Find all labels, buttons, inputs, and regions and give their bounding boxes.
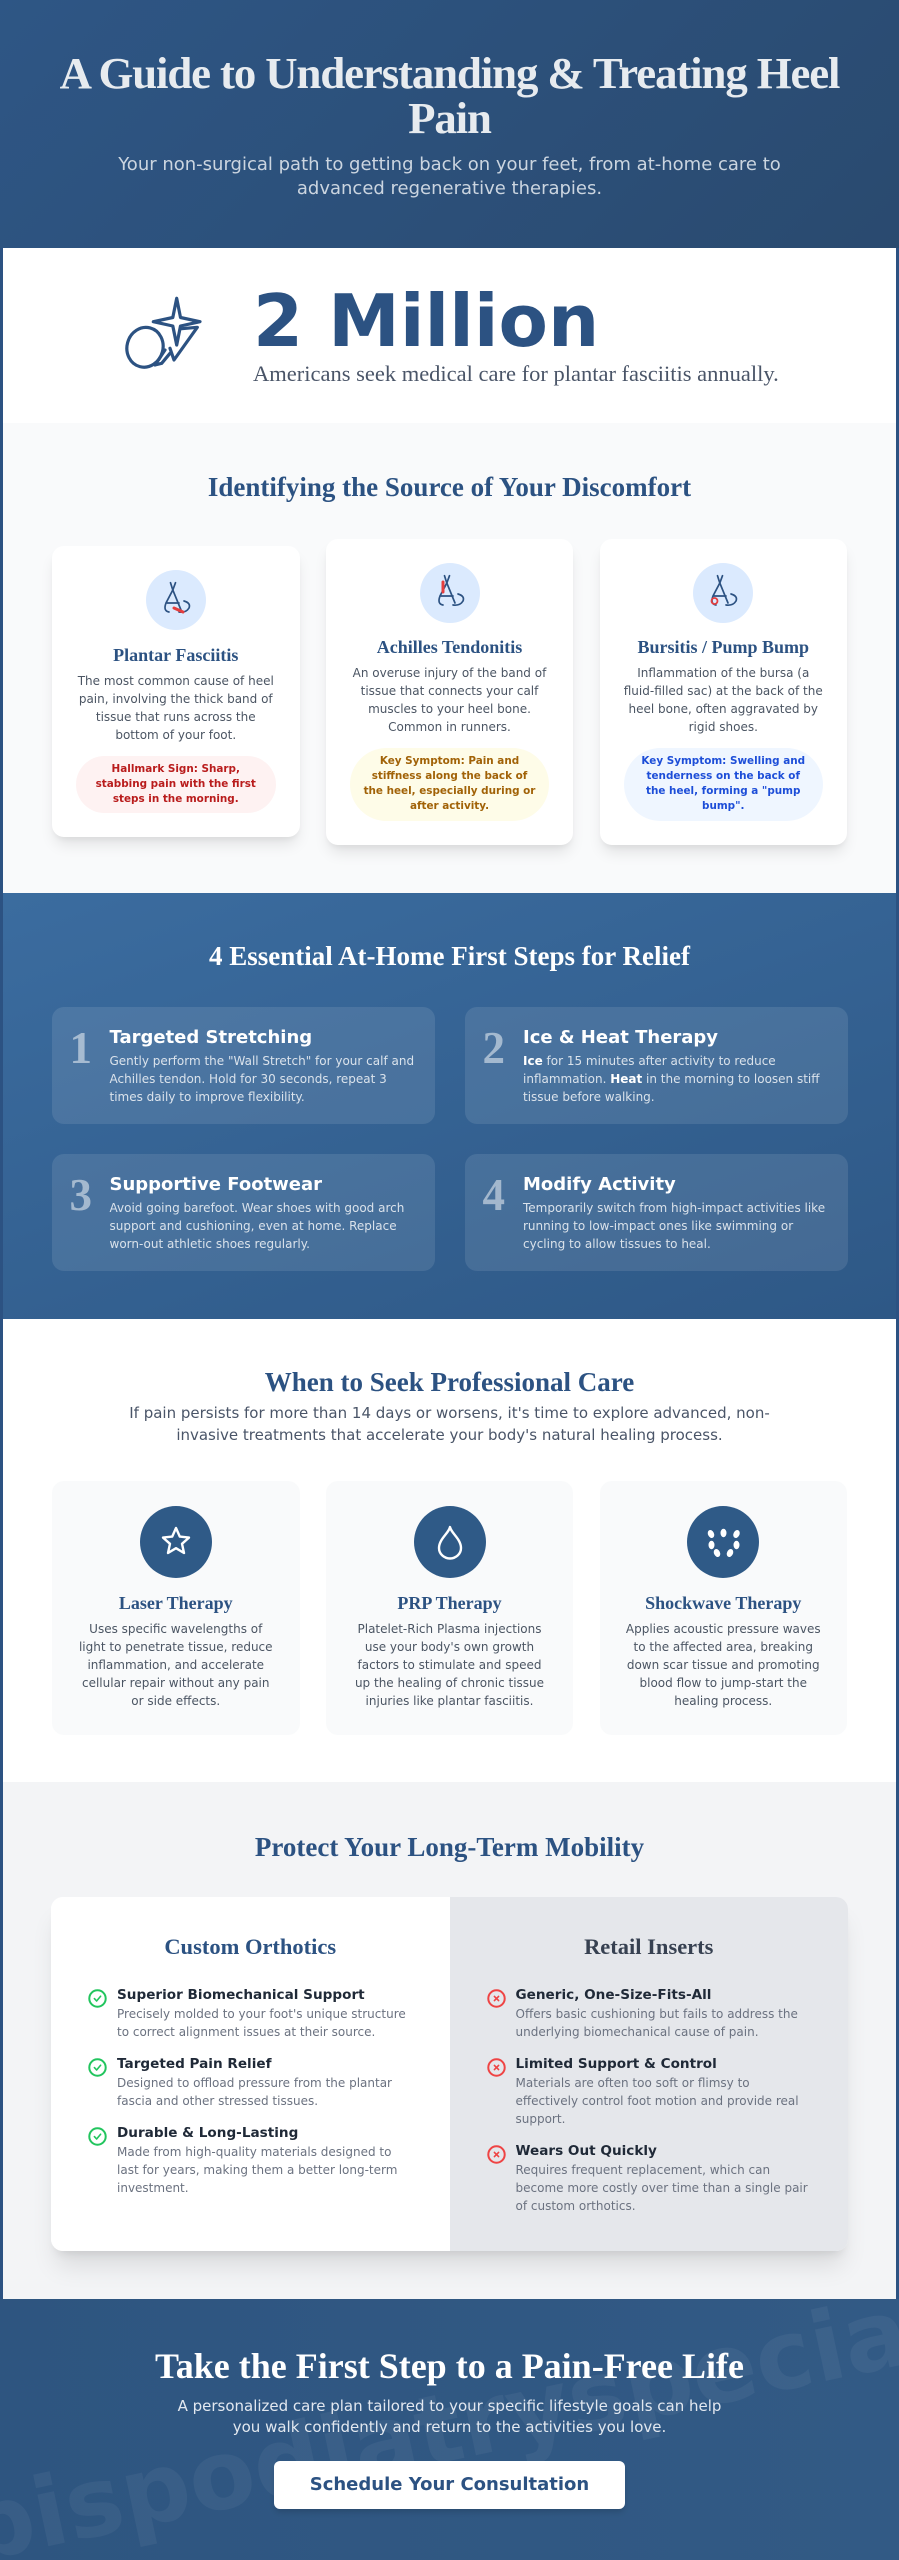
drawback text: Requires frequent replacement, which can (516, 2163, 770, 2177)
key symptom pill: bump". (702, 800, 744, 812)
icon: foot with plantar highlight (146, 570, 206, 630)
subtitle: advanced regenerative therapies. (297, 178, 602, 199)
drawback text: Offers basic cushioning but fails to address the (516, 2007, 798, 2021)
card description (624, 666, 823, 734)
drawback text: support. (516, 2112, 565, 2126)
CTA heading: Take the First Step to a Pain-Free Life (155, 2346, 744, 2386)
check icon (88, 2127, 107, 2146)
section heading: Protect Your Long-Term Mobility (255, 1832, 644, 1862)
title (60, 48, 840, 143)
therapy title: Shockwave Therapy (645, 1593, 801, 1613)
call to action banner (0, 2299, 899, 2560)
step 4 (464, 1154, 848, 1271)
CTA text: A personalized care plan tailored to your specific lifestyle goals can help (178, 2397, 721, 2415)
check icon (88, 1989, 107, 2008)
icon: droplet (414, 1506, 486, 1578)
card title: Achilles Tendonitis (377, 637, 522, 657)
icon: pulse dots (687, 1506, 759, 1578)
step text: Gently perform the "Wall Stretch" for your calf and (110, 1054, 414, 1068)
card: plantar fasciitis (52, 546, 300, 837)
benefit text: investment. (117, 2181, 189, 2195)
cross icon (487, 1989, 506, 2008)
CTA button: Schedule Your Consultation (310, 2474, 589, 2495)
hallmark sign pill: stabbing pain with the first (96, 778, 256, 790)
card description: pain, involving the thick band of (79, 692, 273, 706)
key symptom pill: the heel, especially during or (364, 785, 535, 797)
step text: Achilles tendon. Hold for 30 seconds, repeat 3 (110, 1072, 387, 1086)
hero statistic panel (3, 248, 896, 423)
step number: 2 (482, 1023, 505, 1073)
section heading: 4 Essential At-Home First Steps for Relief (209, 941, 690, 971)
therapy description: cellular repair without any pain (82, 1676, 270, 1690)
card title: Bursitis / Pump Bump (637, 637, 809, 657)
step title: Ice & Heat Therapy (523, 1027, 718, 1048)
step text: cycling to allow tissues to heal. (523, 1237, 711, 1251)
card description: An overuse injury of the band of (353, 666, 546, 680)
step text: Ice for 15 minutes after activity to reduce (523, 1054, 776, 1068)
section intro: invasive treatments that accelerate your body's natural healing process. (176, 1426, 723, 1444)
step 3 (52, 1154, 434, 1271)
statistic caption: Americans seek medical care for plantar fasciitis annually. (253, 361, 779, 386)
therapy description: Platelet-Rich Plasma injections (358, 1622, 541, 1636)
comparison panel (51, 1897, 848, 2251)
therapy description: down scar tissue and promoting (627, 1658, 820, 1672)
card description: tissue that runs across the (96, 710, 256, 724)
step number: 1 (70, 1023, 92, 1073)
benefit 2 (88, 2056, 392, 2108)
step 1 (52, 1007, 434, 1124)
card: achilles tendonitis (326, 539, 573, 845)
therapy title: Laser Therapy (119, 1593, 233, 1613)
benefit text: Made from high-quality materials designed to (117, 2145, 391, 2159)
therapy description: inflammation, and accelerate (87, 1658, 264, 1672)
therapy title: PRP Therapy (397, 1593, 502, 1613)
step text (522, 1201, 825, 1251)
step title: Supportive Footwear (110, 1174, 322, 1195)
card description (352, 666, 547, 734)
therapy description: up the healing of chronic tissue (355, 1676, 544, 1690)
step number: 3 (70, 1170, 92, 1220)
icon: foot with bursa highlight (693, 563, 753, 623)
section: long-term mobility (3, 1782, 896, 2299)
therapy card: PRP (326, 1481, 573, 1735)
card description: muscles to your heel bone. (368, 702, 531, 716)
step number: 4 (482, 1170, 505, 1220)
big number: 2 Million (253, 279, 599, 363)
therapy description: factors to stimulate and speed (358, 1658, 541, 1672)
therapy description (626, 1622, 821, 1708)
column title: Retail Inserts (584, 1934, 713, 1959)
therapy description (79, 1622, 273, 1708)
drawback text (516, 2076, 799, 2126)
card description: bottom of your foot. (115, 728, 236, 742)
step title: Targeted Stretching (110, 1027, 312, 1048)
icon: heel star and check (125, 296, 202, 369)
therapy description: healing process. (674, 1694, 772, 1708)
step text (110, 1201, 404, 1251)
therapy card: laser (52, 1481, 300, 1735)
benefit title: Targeted Pain Relief (117, 2056, 272, 2072)
key symptom pill: Key Symptom: Pain and (380, 755, 519, 767)
benefit text (117, 2145, 397, 2195)
icon: star (140, 1506, 212, 1578)
step text: running to low-impact ones like swimming or (523, 1219, 793, 1233)
key symptom pill: after activity. (410, 800, 489, 812)
key symptom pill (350, 748, 549, 821)
section: identifying the source (3, 423, 896, 893)
card description (78, 674, 274, 742)
cross icon (487, 2058, 506, 2077)
card title: Plantar Fasciitis (113, 645, 238, 665)
drawback text: Materials are often too soft or flimsy to (516, 2076, 750, 2090)
drawback title: Wears Out Quickly (516, 2143, 657, 2159)
step text (110, 1054, 414, 1104)
benefit text: fascia and other stressed tissues. (117, 2094, 318, 2108)
benefit title: Durable & Long-Lasting (117, 2125, 298, 2141)
title: A Guide to Understanding & Treating Heel (60, 48, 839, 98)
step title: Modify Activity (523, 1174, 676, 1195)
card description: tissue that connects your calf (361, 684, 538, 698)
therapy description: Applies acoustic pressure waves (626, 1622, 821, 1636)
step text (523, 1054, 820, 1104)
column: custom orthotics (51, 1897, 450, 2251)
therapy description (355, 1622, 544, 1708)
key symptom pill: the heel, forming a "pump (646, 785, 800, 797)
section: professional care (3, 1319, 896, 1782)
section: at-home first steps (3, 893, 896, 1319)
therapy description: use your body's own growth (365, 1640, 534, 1654)
subtitle (118, 154, 781, 199)
card description: fluid-filled sac) at the back of the (624, 684, 823, 698)
therapy description: to the affected area, breaking (634, 1640, 813, 1654)
benefit text: to correct alignment issues at their source. (117, 2025, 375, 2039)
drawback 2 (487, 2056, 799, 2126)
step text: Temporarily switch from high-impact activities like (523, 1201, 825, 1215)
drawback 1 (487, 1987, 798, 2039)
drawback text: become more costly over time than a single pair (516, 2181, 808, 2195)
step text: times daily to improve flexibility. (110, 1090, 305, 1104)
hallmark sign pill: Hallmark Sign: Sharp, (112, 763, 240, 775)
check icon (88, 2058, 107, 2077)
therapy description: or side effects. (131, 1694, 220, 1708)
cross icon (487, 2145, 506, 2164)
card description: Common in runners. (388, 720, 511, 734)
benefit 1 (88, 1987, 406, 2039)
drawback text (516, 2163, 808, 2213)
card description: heel bone, often aggravated by (628, 702, 818, 716)
section intro: If pain persists for more than 14 days or worsens, it's time to explore advanced, non- (129, 1404, 770, 1422)
step text: Avoid going barefoot. Wear shoes with good arch (110, 1201, 404, 1215)
drawback text (516, 2007, 798, 2039)
drawback text: of custom orthotics. (516, 2199, 636, 2213)
key symptom pill: stiffness along the back of (372, 770, 527, 782)
drawback title: Generic, One-Size-Fits-All (516, 1987, 711, 2003)
key symptom pill: tenderness on the back of (647, 770, 800, 782)
header banner (0, 0, 899, 248)
step text: inflammation. Heat in the morning to loosen stiff (523, 1072, 820, 1086)
step text: worn-out athletic shoes regularly. (110, 1237, 310, 1251)
subtitle: Your non-surgical path to getting back on your feet, from at-home care to (118, 154, 781, 175)
step 2 (464, 1007, 848, 1124)
column: retail inserts (450, 1897, 848, 2251)
title: Pain (408, 93, 491, 143)
card description: Inflammation of the bursa (a (637, 666, 809, 680)
section heading: When to Seek Professional Care (265, 1367, 634, 1397)
key symptom pill: Key Symptom: Swelling and (641, 755, 805, 767)
benefit text: Designed to offload pressure from the plantar (117, 2076, 392, 2090)
benefit text (117, 2076, 392, 2108)
benefit text: last for years, making them a better long-term (117, 2163, 397, 2177)
hallmark sign pill: steps in the morning. (113, 793, 239, 805)
drawback title: Limited Support & Control (516, 2056, 717, 2072)
therapy description: injuries like plantar fasciitis. (366, 1694, 533, 1708)
therapy description: Uses specific wavelengths of (89, 1622, 262, 1636)
icon: foot with achilles highlight (420, 563, 480, 623)
drawback text: underlying biomechanical cause of pain. (516, 2025, 759, 2039)
therapy card: shockwave (600, 1481, 847, 1735)
drawback 3 (487, 2143, 808, 2213)
drawback text: effectively control foot motion and provide real (516, 2094, 799, 2108)
hallmark sign pill (76, 756, 276, 813)
CTA text: you walk confidently and return to the activities you love. (233, 2418, 666, 2436)
card description: The most common cause of heel (78, 674, 274, 688)
section heading: Identifying the Source of Your Discomfort (208, 472, 691, 502)
benefit 3 (88, 2125, 397, 2195)
benefit text (117, 2007, 406, 2039)
CTA button (274, 2461, 625, 2509)
column title: Custom Orthotics (164, 1934, 336, 1959)
card description: rigid shoes. (689, 720, 758, 734)
benefit text: Precisely molded to your foot's unique structure (117, 2007, 406, 2021)
benefit title: Superior Biomechanical Support (117, 1987, 365, 2003)
CTA text (178, 2397, 721, 2436)
card: bursitis (600, 539, 847, 845)
step text: support and cushioning, even at home. Replace (110, 1219, 397, 1233)
therapy description: light to penetrate tissue, reduce (79, 1640, 273, 1654)
section intro (129, 1404, 770, 1444)
key symptom pill (624, 748, 823, 821)
therapy description: blood flow to jump-start the (640, 1676, 807, 1690)
step text: tissue before walking. (523, 1090, 655, 1104)
